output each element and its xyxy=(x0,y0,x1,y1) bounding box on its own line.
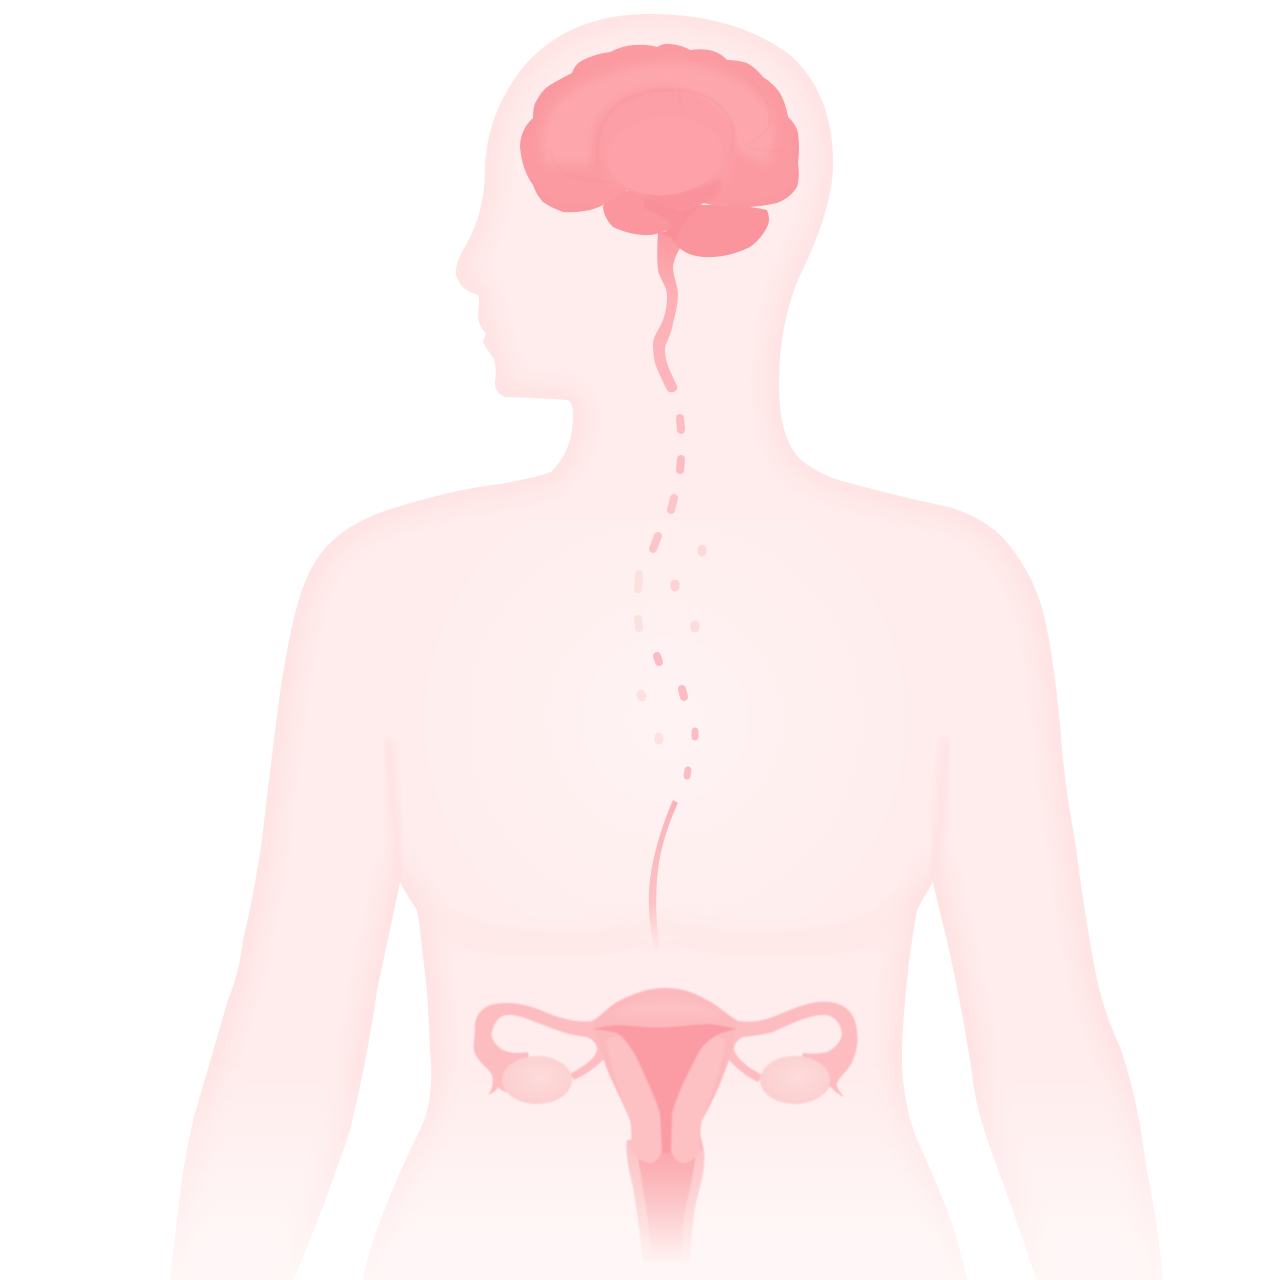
human body silhouette xyxy=(160,14,1170,1280)
right fallopian tube and infundibulum xyxy=(720,1002,857,1097)
temporal lobe xyxy=(603,190,680,235)
uterine wall right xyxy=(671,1036,726,1163)
uterine cavity xyxy=(593,1024,736,1153)
central fold xyxy=(644,190,708,240)
cerebrum gyri shading xyxy=(544,64,772,206)
uterus fundus highlight xyxy=(612,1000,722,1016)
brain xyxy=(520,44,799,392)
left fallopian tube and infundibulum xyxy=(474,1003,612,1095)
uterine wall left xyxy=(606,1036,662,1163)
illustration: brain to uterus connection in a human body xyxy=(170,14,1163,1280)
uterus body xyxy=(592,988,738,1150)
reproductive system xyxy=(474,988,857,1262)
cerebrum xyxy=(520,44,799,212)
right ovary xyxy=(760,1056,830,1104)
lower spinal cord segment xyxy=(649,800,678,953)
thalamus xyxy=(603,111,727,201)
vagina inner canal xyxy=(637,1150,696,1262)
dashed nerve pathway xyxy=(638,418,702,776)
vagina outer wall xyxy=(627,1135,704,1262)
left ovary xyxy=(502,1056,572,1104)
brain stem and upper spinal cord xyxy=(653,232,680,392)
cerebellum xyxy=(672,205,769,257)
cerebellum folds xyxy=(686,218,765,242)
body shading xyxy=(160,14,1170,1280)
